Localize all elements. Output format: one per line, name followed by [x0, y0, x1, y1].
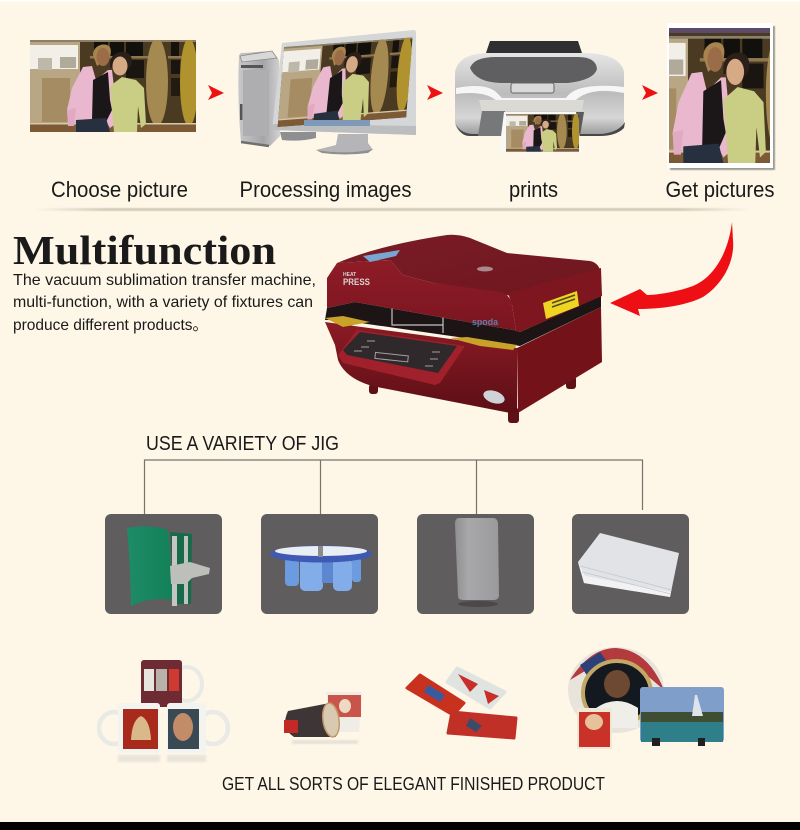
- text block: description: [13, 272, 316, 334]
- connector lines to jigs: [144, 460, 642, 514]
- badge: [482, 388, 506, 406]
- gold platens: [325, 316, 370, 327]
- text block: description: multi-function, with a variety of fixtures can: [13, 294, 313, 311]
- brand mark: spoda: [472, 317, 499, 327]
- heading: use a variety of jig: USE A VARIETY OF JIG: [146, 433, 339, 455]
- lid label: PRESS: [343, 277, 370, 287]
- arrow: step three to four: [642, 85, 658, 100]
- illustration: heat press machine: HEAT: [343, 272, 356, 278]
- product: phone cases: [407, 668, 516, 738]
- arrow: step one to two: [208, 85, 224, 100]
- icon: monitor with photo: [272, 30, 416, 154]
- arrow: curved red arrow to machine: [610, 222, 733, 316]
- photo: couple: [30, 38, 198, 132]
- press lid top: [337, 235, 601, 296]
- control panel: [338, 330, 465, 385]
- press lid front: [327, 260, 516, 331]
- icon: blue cup clamp: [270, 546, 372, 591]
- bottom black band: [0, 822, 800, 830]
- text block: description: produce different products。: [13, 317, 208, 334]
- machine gap: [325, 296, 601, 346]
- illustration: heat press machine: [325, 235, 602, 423]
- label: prints: prints: [509, 177, 558, 202]
- label: Processing images: Processing images: [240, 177, 412, 202]
- product: plate and photo panels: [568, 647, 724, 749]
- arrow: step two to three: [427, 85, 443, 100]
- press lid side: [508, 268, 602, 332]
- lid top highlights: [363, 250, 400, 262]
- yellow warning label: [543, 291, 579, 319]
- caption: finished product: GET ALL SORTS OF ELEGANT FINISHED PRODUCT: [222, 773, 605, 794]
- text block: description: The vacuum sublimation transfer machine,: [13, 272, 316, 289]
- product: stacked mugs: [99, 660, 228, 762]
- workflow step: get pictures: [629, 23, 800, 202]
- product: shot glasses: [284, 692, 362, 744]
- panel: phone case jig: [417, 514, 534, 614]
- icon: computer tower: [238, 51, 316, 146]
- icon: grey phone case: [455, 518, 499, 607]
- panel: mug jig: [105, 514, 222, 614]
- machine base: [325, 322, 517, 413]
- heading: Multifunction: Multifunction: [13, 227, 276, 273]
- icon: photo printer: [455, 41, 625, 153]
- label: Get pictures: Get pictures: [666, 177, 774, 202]
- section divider shadow: [35, 208, 750, 211]
- photo: printed portrait: [629, 23, 800, 170]
- machine feet: [369, 376, 576, 423]
- panel: cup jig: [261, 514, 378, 614]
- workflow step: choose picture: [30, 38, 198, 202]
- icon: green mug clamp: [127, 526, 210, 606]
- workflow step: processing images: [238, 30, 416, 202]
- workflow step: prints: [455, 41, 625, 202]
- label: Choose picture: Choose picture: [51, 177, 188, 202]
- panel: sheets jig: [572, 514, 689, 614]
- clamp: [392, 308, 443, 333]
- icon: white sublimation sheets: [578, 533, 679, 597]
